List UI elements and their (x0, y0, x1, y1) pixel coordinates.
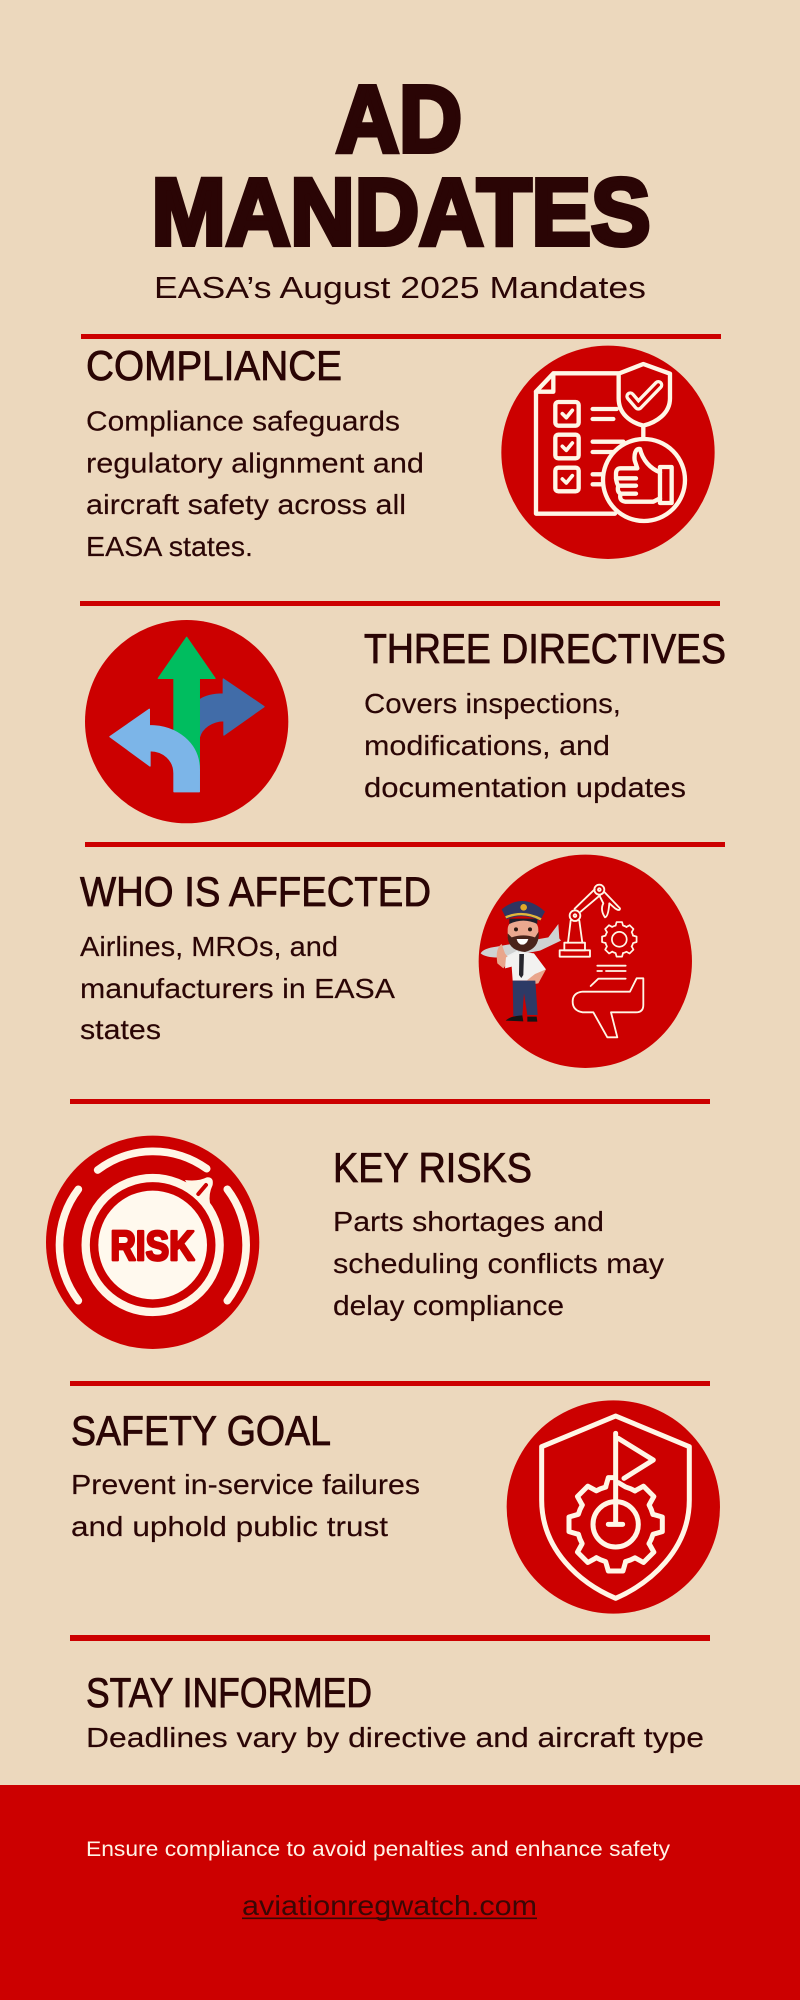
title (152, 66, 650, 266)
text block: three directives: Covers inspections, (364, 688, 621, 719)
panel: footer (0, 1785, 800, 2000)
text block: three directives: documentation updates (364, 772, 686, 803)
heading: compliance: COMPLIANCE (86, 342, 342, 389)
footer link: aviationregwatch.com (242, 1890, 537, 1921)
text block: who is affected: manufacturers in EASA (80, 973, 395, 1004)
text block: compliance: EASA states. (86, 531, 253, 562)
text block: compliance (86, 406, 424, 562)
heading: three directives: THREE DIRECTIVES (364, 625, 726, 672)
panel: compliance (86, 342, 715, 562)
icon: pilot holding plane (481, 901, 561, 1022)
text block: stay informed: Deadlines vary by directive and aircraft type (86, 1722, 704, 1753)
panel: stay informed (86, 1669, 704, 1753)
title: MANDATES (152, 160, 650, 266)
text block: safety goal (71, 1469, 420, 1542)
text block: key risks: Parts shortages and (333, 1206, 604, 1237)
text block: three directives (364, 688, 686, 803)
panel: safety goal (71, 1400, 720, 1614)
text block: safety goal: and uphold public trust (71, 1511, 388, 1542)
panel: three directives (85, 620, 726, 823)
icon: robot arm (560, 885, 620, 957)
text block: compliance: Compliance safeguards (86, 406, 400, 436)
icon: gear (602, 922, 637, 957)
text block: compliance: regulatory alignment and (86, 448, 424, 478)
text block: who is affected (80, 931, 395, 1045)
icon label: risk: RISK (110, 1222, 195, 1269)
text block: who is affected: Airlines, MROs, and (80, 931, 338, 962)
text block: who is affected: states (80, 1014, 161, 1045)
icon: shield with gear and flag (507, 1400, 720, 1614)
text block: key risks: scheduling conflicts may (333, 1248, 664, 1279)
panel: key risks (46, 1136, 664, 1349)
text block: safety goal: Prevent in-service failures (71, 1469, 420, 1500)
icon: risk dial (46, 1136, 259, 1349)
icon: three-way arrows (85, 620, 288, 823)
subtitle: EASA’s August 2025 Mandates (154, 270, 646, 305)
heading: stay informed: STAY INFORMED (86, 1669, 372, 1716)
text block: key risks (333, 1206, 664, 1321)
icon: plane outline (573, 966, 643, 1037)
heading: safety goal: SAFETY GOAL (71, 1407, 331, 1454)
text block: compliance: aircraft safety across all (86, 489, 406, 520)
text block: three directives: modifications, and (364, 730, 610, 761)
icon: pilot with robot arm, gear and plane (479, 855, 692, 1068)
heading: key risks: KEY RISKS (333, 1144, 532, 1191)
title: AD (336, 66, 462, 172)
panel: who is affected (80, 855, 692, 1068)
heading: who is affected: WHO IS AFFECTED (80, 868, 431, 915)
footer message: Ensure compliance to avoid penalties and enhance safety (86, 1837, 670, 1861)
icon: checklist with shield and thumbs up (501, 346, 715, 559)
text block: key risks: delay compliance (333, 1290, 564, 1321)
